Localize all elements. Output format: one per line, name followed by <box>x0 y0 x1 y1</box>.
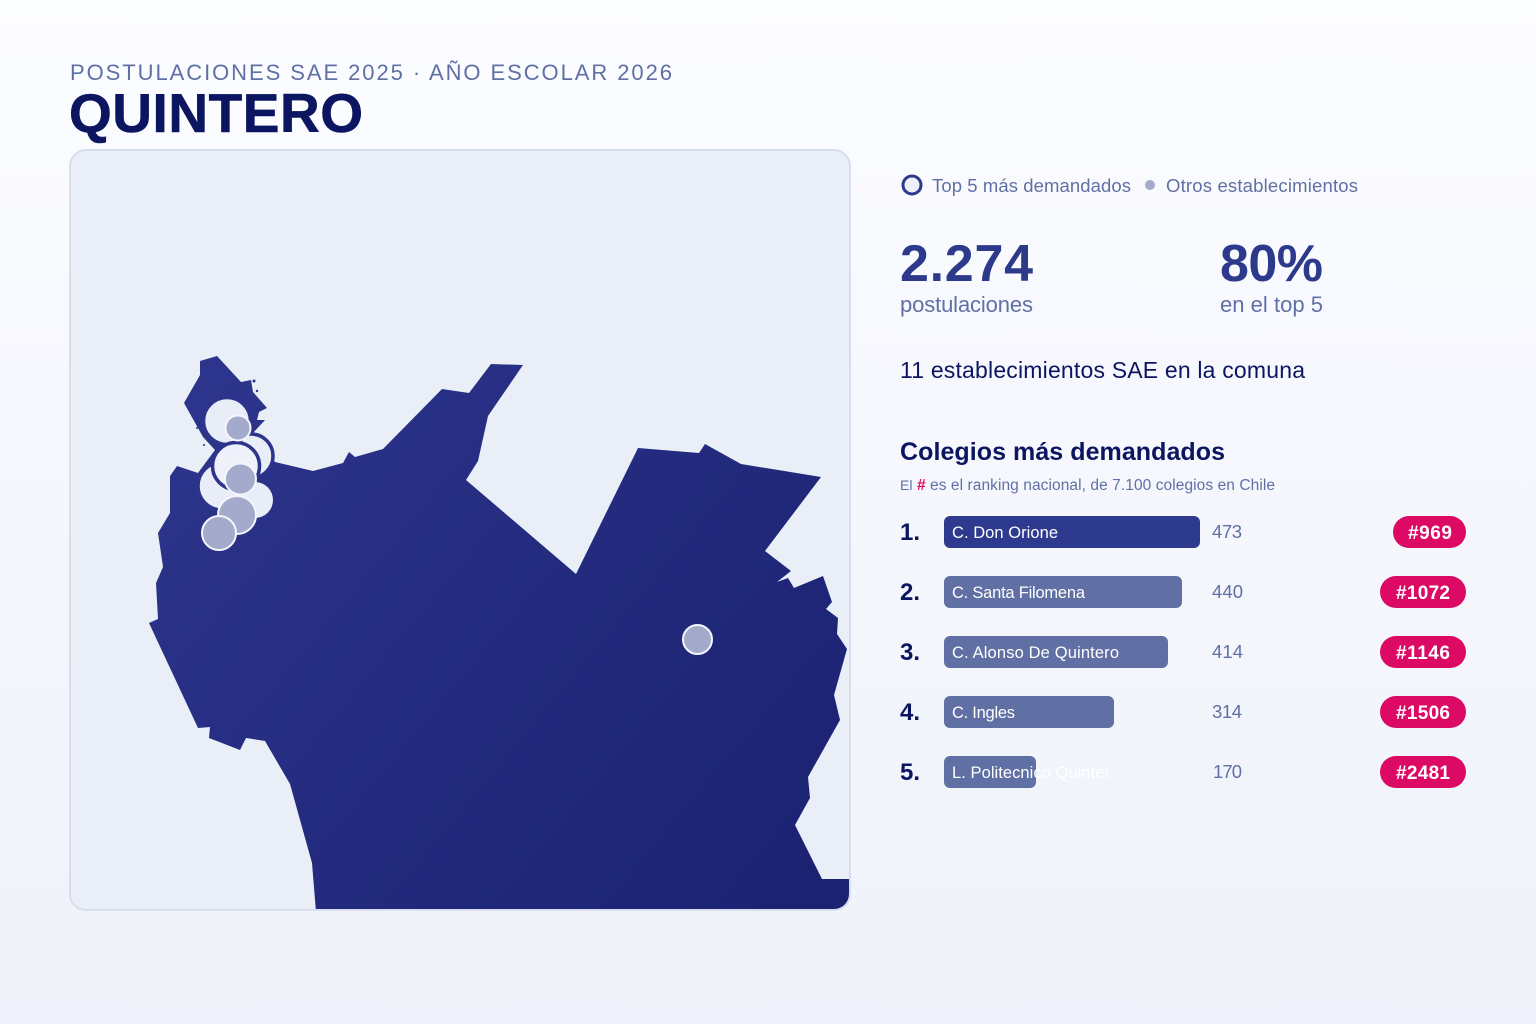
row 2: 440 <box>1212 581 1243 602</box>
bar chart: schools <box>900 516 1466 788</box>
legend <box>903 175 1358 196</box>
row 4: 4. <box>900 699 920 726</box>
stat: postulaciones: postulaciones <box>900 292 1033 317</box>
row 3: #1146 <box>1396 643 1450 664</box>
ranking note: es el ranking nacional, de 7.100 colegios en Chile <box>930 477 1275 494</box>
legend: top 5: Top 5 más demandados <box>932 175 1131 196</box>
row 2: #1072 <box>1396 583 1450 604</box>
establishments count: 11 establecimientos SAE en la comuna <box>900 357 1305 383</box>
commune shape <box>149 356 852 912</box>
panel: map <box>70 150 852 912</box>
row 1: C. Don Orione <box>952 524 1058 542</box>
row 4: C. Ingles <box>952 704 1015 722</box>
map card <box>70 150 850 910</box>
row 2: C. Santa Filomena <box>952 584 1086 602</box>
row 3: 414 <box>1212 641 1243 662</box>
row 3 <box>900 636 1466 668</box>
ranking note: # <box>917 477 926 494</box>
row 4 <box>900 696 1466 728</box>
row 1: 473 <box>1212 521 1242 542</box>
row 5: L. Politecnico Quinter <box>952 764 1110 782</box>
title: QUINTERO <box>69 82 363 144</box>
row 3: 3. <box>900 639 920 666</box>
stat: postulaciones: 2.274 <box>900 235 1033 293</box>
row 5 <box>900 756 1466 788</box>
subtitle: POSTULACIONES SAE 2025 · AÑO ESCOLAR 2026 <box>70 60 672 85</box>
header <box>69 60 672 144</box>
legend: others: Otros establecimientos <box>1166 175 1358 196</box>
row 1 <box>900 516 1466 548</box>
row 2: 2. <box>900 579 920 606</box>
row 4: 314 <box>1212 701 1242 722</box>
stat: top 5 share: 80% <box>1220 235 1323 293</box>
ranking note: El <box>900 477 912 493</box>
other school markers <box>202 416 712 654</box>
ranking heading: Colegios más demandados <box>900 438 1225 466</box>
islets <box>192 380 258 446</box>
row 4: #1506 <box>1396 703 1450 724</box>
row 2 <box>900 576 1466 608</box>
row 5: #2481 <box>1396 763 1450 784</box>
row 5: 170 <box>1213 761 1242 782</box>
stat: top 5 share: en el top 5 <box>1220 292 1323 317</box>
row 1: 1. <box>900 519 920 546</box>
row 1: #969 <box>1408 523 1452 544</box>
row 3: C. Alonso De Quintero <box>952 644 1119 662</box>
top 5 markers <box>198 398 273 518</box>
row 5: 5. <box>900 759 920 786</box>
